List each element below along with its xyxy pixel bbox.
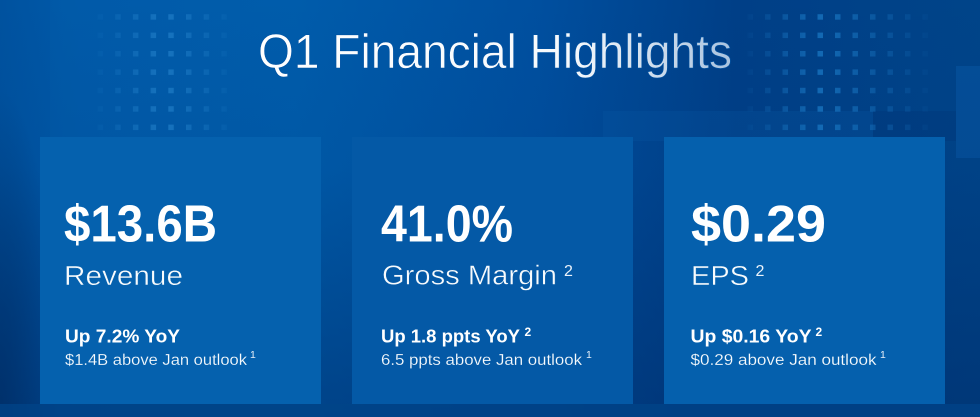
dot pattern left [116, 14, 209, 130]
gross margin year over year: Up 1.8 ppts YoY [381, 326, 520, 346]
gross margin value: 41.0% [381, 196, 513, 254]
eps value: $0.29 [691, 196, 826, 254]
gross margin label: Gross Margin [382, 260, 557, 290]
panel background [40, 137, 321, 404]
dot pattern right [765, 14, 910, 130]
eps versus outlook: $0.29 above Jan outlook [690, 352, 877, 369]
eps label: 2 [756, 263, 764, 280]
revenue label: Revenue [64, 260, 183, 291]
revenue year over year: Up 7.2% YoY [65, 326, 180, 346]
revenue versus outlook: $1.4B above Jan outlook [65, 352, 247, 369]
gross margin versus outlook: 6.5 ppts above Jan outlook [381, 352, 582, 369]
eps year over year: Up $0.16 YoY [690, 326, 812, 346]
panel: gross margin [352, 137, 633, 404]
gross margin label: 2 [564, 263, 573, 280]
title: Q1 Financial Highlights [258, 26, 732, 79]
panel: eps [664, 137, 945, 404]
panel: revenue [40, 137, 321, 404]
gross margin year over year: 2 [524, 325, 532, 339]
eps versus outlook: 1 [880, 349, 886, 361]
revenue versus outlook: 1 [250, 349, 256, 361]
panel background [352, 137, 633, 404]
gross margin versus outlook: 1 [586, 349, 592, 361]
revenue value: $13.6B [64, 196, 217, 254]
eps year over year: 2 [816, 325, 822, 339]
eps label: EPS [691, 260, 749, 291]
panel background [664, 137, 945, 404]
